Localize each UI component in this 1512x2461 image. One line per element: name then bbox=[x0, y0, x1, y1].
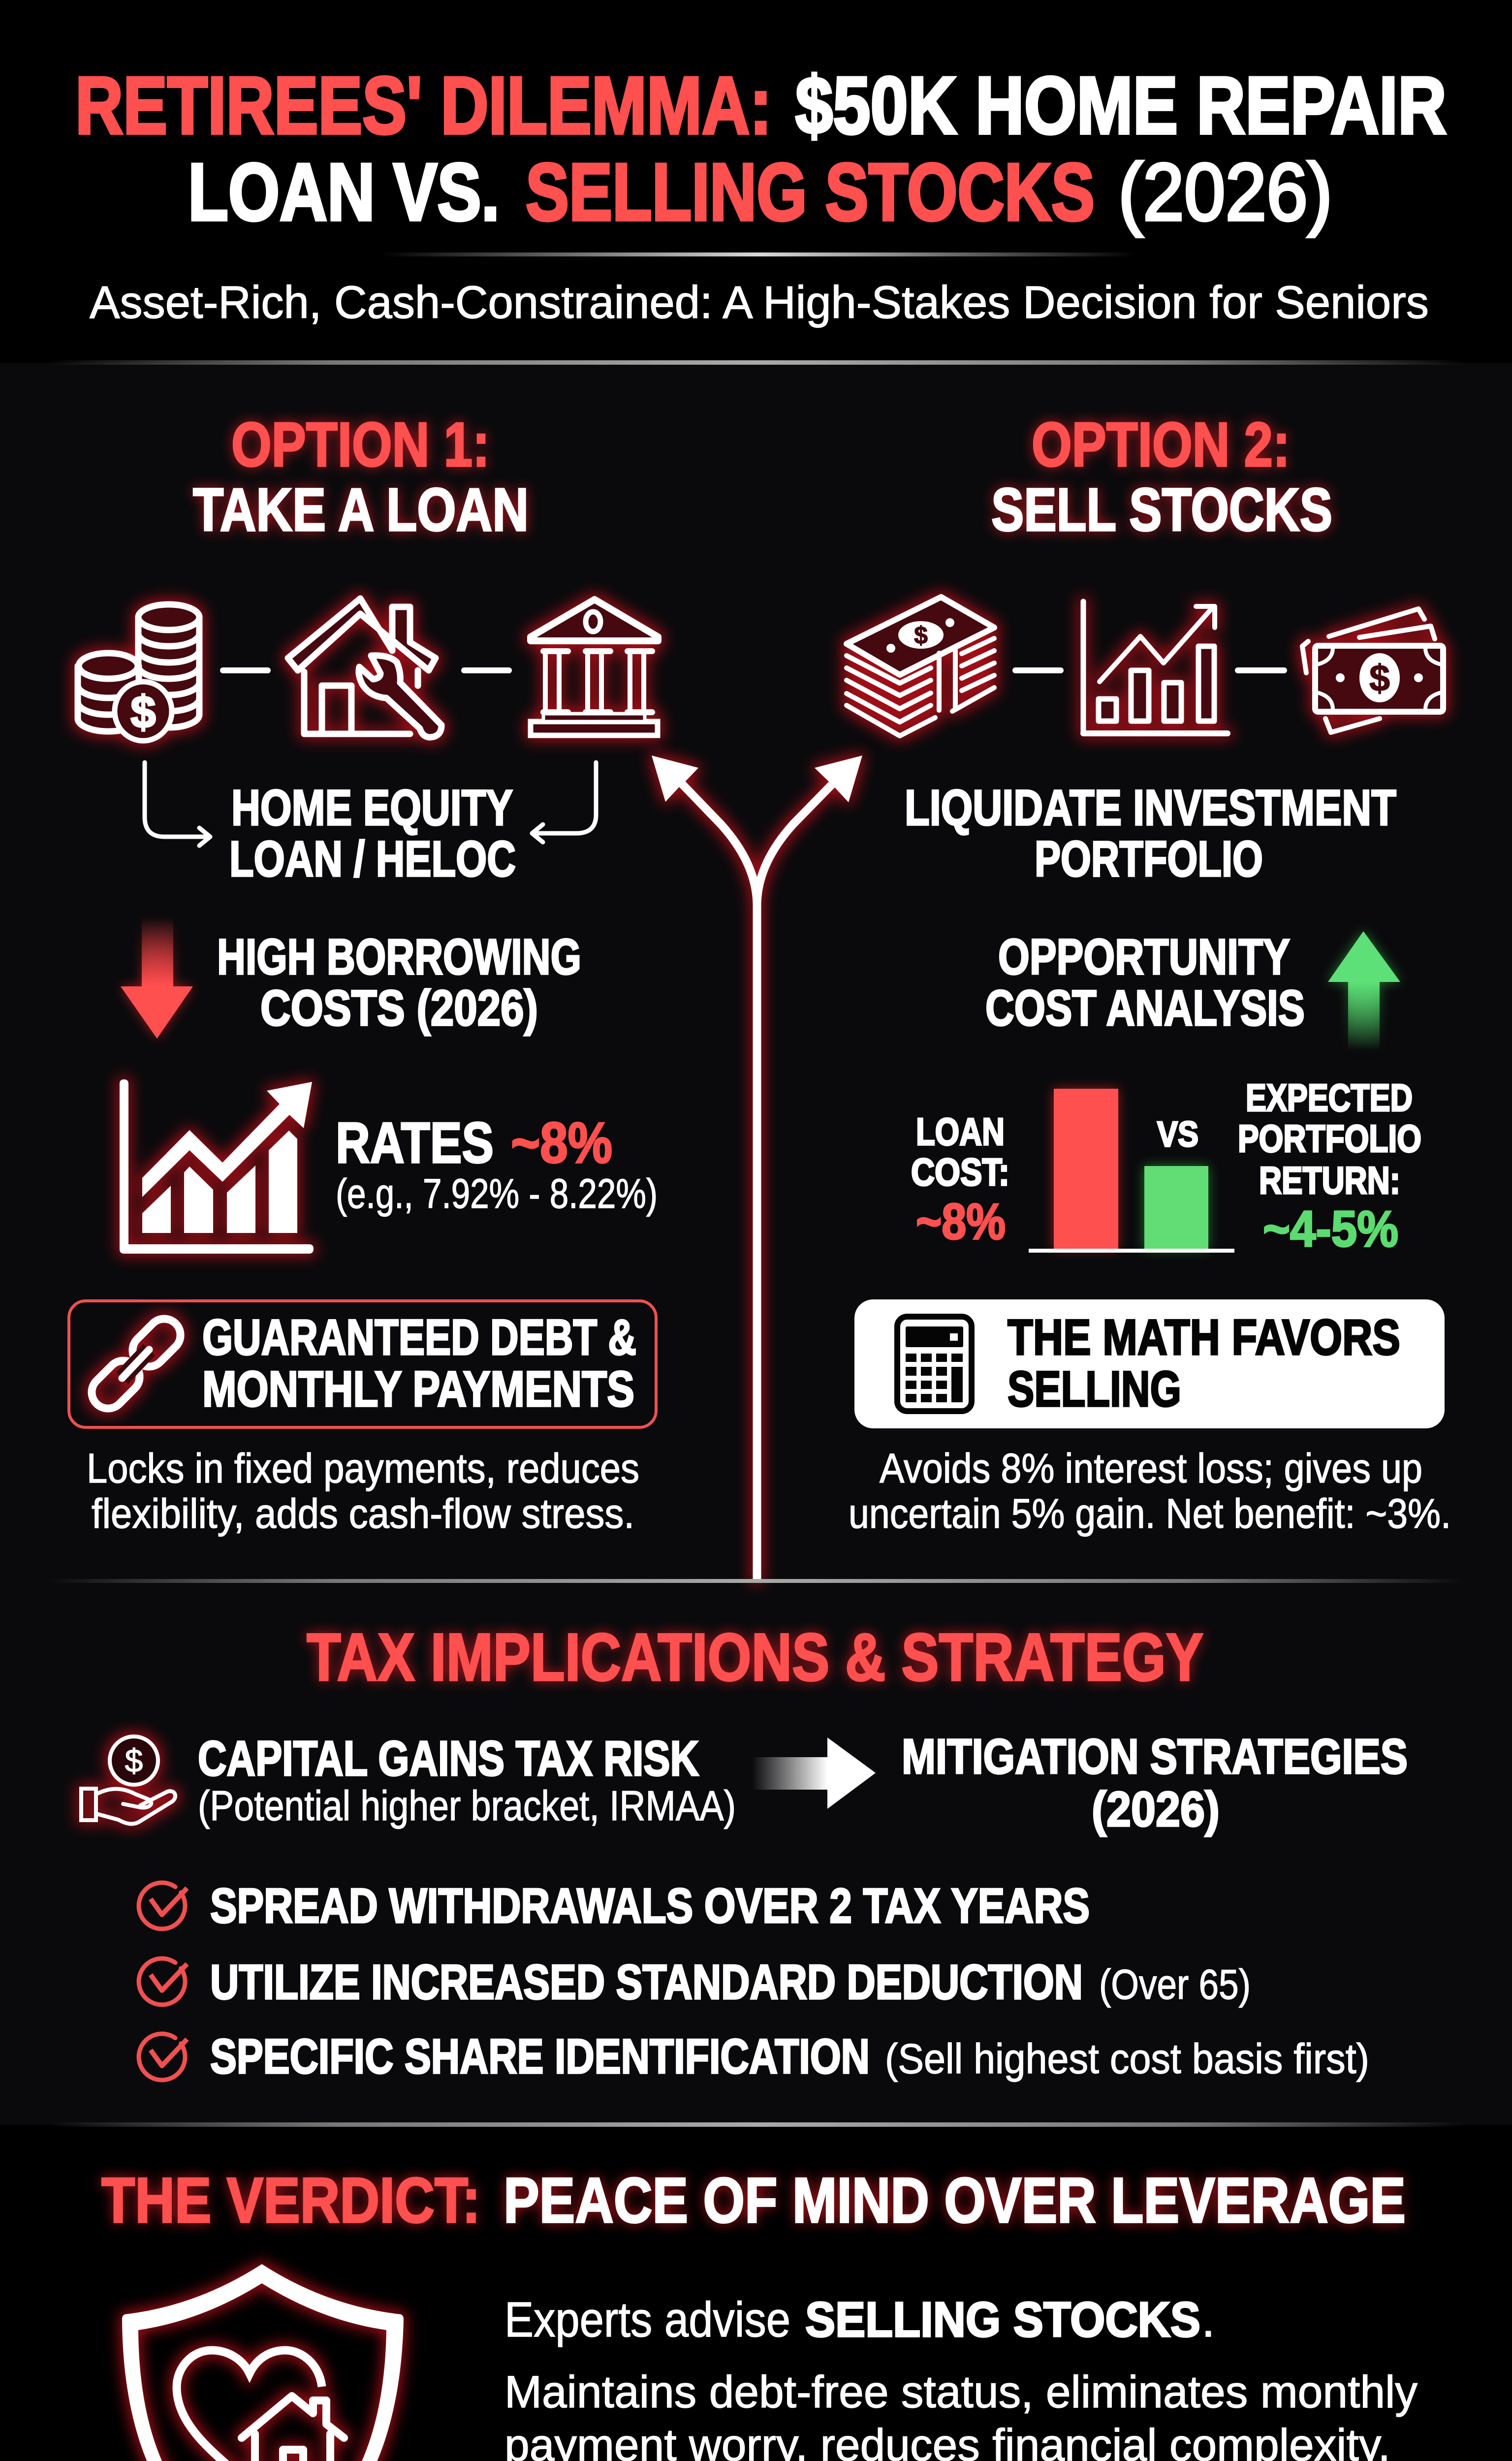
header title: RETIREES' DILEMMA: bbox=[75, 60, 772, 151]
text: rates: ~8% bbox=[511, 1110, 612, 1175]
panel: guaranteed debt callout: MONTHLY PAYMENTS bbox=[202, 1361, 634, 1417]
text: opportunity cost: OPPORTUNITY bbox=[998, 929, 1290, 985]
text: expected return label: ~4-5% bbox=[1263, 1200, 1398, 1257]
text: sell benefit: Avoids 8% interest loss; gives up bbox=[880, 1445, 1422, 1491]
icon: money stack bbox=[847, 597, 994, 736]
text: mitigation strategies: MITIGATION STRATEGIES bbox=[902, 1729, 1408, 1784]
strategy item: standard deduction: (Over 65) bbox=[1099, 1961, 1251, 2008]
text: expected return label bbox=[1238, 1076, 1421, 1257]
connector dash bbox=[1235, 667, 1287, 673]
text: opportunity cost: COST ANALYSIS bbox=[985, 980, 1305, 1036]
text: loan cost label: LOAN bbox=[916, 1110, 1005, 1153]
connector dash bbox=[220, 667, 271, 673]
strategy item: share identification: (Sell highest cost basis first) bbox=[885, 2036, 1369, 2082]
strategy item: standard deduction: UTILIZE INCREASED STANDARD DEDUCTION bbox=[210, 1955, 1083, 2009]
heading: tax implications: TAX IMPLICATIONS & STRATEGY bbox=[307, 1620, 1203, 1695]
text: expected return label: PORTFOLIO bbox=[1238, 1117, 1421, 1160]
text: mitigation strategies bbox=[902, 1729, 1408, 1837]
panel: option 2 heading: OPTION 2: bbox=[1032, 410, 1290, 479]
text: high borrowing costs: COSTS (2026) bbox=[260, 980, 538, 1036]
arrow: home equity right connector bbox=[532, 762, 596, 842]
icon: coin stacks bbox=[78, 604, 199, 741]
header title: LOAN VS. bbox=[188, 147, 500, 237]
strategy item: spread withdrawals: SPREAD WITHDRAWALS OVER 2 TAX YEARS bbox=[210, 1878, 1090, 1933]
text: mitigation strategies: (2026) bbox=[1092, 1782, 1220, 1837]
text: high borrowing costs bbox=[217, 929, 581, 1036]
heading: verdict: THE VERDICT: bbox=[101, 2164, 480, 2236]
panel: math favors callout bbox=[854, 1299, 1445, 1428]
bar chart: loan vs portfolio bbox=[1029, 1089, 1234, 1253]
text: capital gains risk bbox=[198, 1731, 736, 1830]
panel: guaranteed debt callout bbox=[69, 1301, 656, 1427]
text: sell benefit bbox=[849, 1445, 1451, 1537]
text: rates: (e.g., 7.92% - 8.22%) bbox=[336, 1170, 658, 1217]
text: loan cost label: COST: bbox=[911, 1150, 1009, 1194]
panel: guaranteed debt callout: GUARANTEED DEBT & bbox=[202, 1309, 636, 1365]
icon: house with wrench bbox=[288, 599, 441, 737]
text: rates bbox=[336, 1110, 658, 1217]
text: capital gains risk: (Potential higher bracket, IRMAA) bbox=[198, 1783, 736, 1830]
icon: money stack: $ bbox=[914, 622, 928, 649]
subtitle: Asset-Rich, Cash-Constrained: A High-Stakes Decision for Seniors bbox=[90, 277, 1429, 328]
text: loan drawback: Locks in fixed payments, reduces bbox=[87, 1445, 639, 1491]
icon: shield with heart and house bbox=[122, 2264, 404, 2461]
icon: cash bills: $ bbox=[1369, 658, 1390, 699]
panel: option 2 heading: SELL STOCKS bbox=[991, 476, 1332, 544]
header title bbox=[75, 60, 1447, 237]
text: expected return label: EXPECTED bbox=[1246, 1076, 1413, 1119]
text: loan drawback: flexibility, adds cash-flow stress. bbox=[92, 1490, 634, 1537]
icon: bank bbox=[531, 599, 658, 735]
icon: red down arrow bbox=[121, 917, 193, 1039]
connector dash bbox=[461, 667, 512, 673]
text: verdict advice: . bbox=[1201, 2292, 1215, 2347]
icon: hand with coin: $ bbox=[125, 1742, 143, 1779]
text: loan cost label bbox=[911, 1110, 1009, 1250]
icon: cash bills bbox=[1302, 609, 1443, 732]
header title: SELLING STOCKS bbox=[526, 147, 1095, 237]
heading: verdict bbox=[101, 2164, 1406, 2236]
text: opportunity cost bbox=[985, 929, 1305, 1036]
header title: (2026) bbox=[1118, 147, 1332, 237]
panel: math favors callout: SELLING bbox=[1008, 1361, 1181, 1417]
bar chart: loan vs portfolio: VS bbox=[1157, 1115, 1198, 1154]
text: high borrowing costs: HIGH BORROWING bbox=[217, 929, 581, 985]
text: home equity bbox=[229, 780, 516, 887]
icon: coin stacks: $ bbox=[130, 687, 156, 737]
text: verdict advice: Maintains debt-free status, eliminates monthly bbox=[504, 2367, 1418, 2417]
arrow: central fork bbox=[652, 756, 862, 1581]
text: sell benefit: uncertain 5% gain. Net benefit: ~3%. bbox=[849, 1490, 1451, 1537]
text: verdict advice bbox=[504, 2292, 1469, 2461]
text: home equity: LOAN / HELOC bbox=[229, 831, 516, 887]
panel: option 1 heading bbox=[193, 410, 529, 544]
icon: calculator bbox=[897, 1317, 972, 1411]
text: capital gains risk: CAPITAL GAINS TAX RISK bbox=[198, 1731, 699, 1786]
text: rates: RATES bbox=[336, 1110, 494, 1175]
icon: growth chart bbox=[1083, 601, 1228, 733]
strategy item: share identification bbox=[139, 2029, 1369, 2083]
text: liquidate portfolio: LIQUIDATE INVESTMENT bbox=[905, 780, 1396, 836]
text: liquidate portfolio: PORTFOLIO bbox=[1035, 831, 1263, 887]
text: verdict advice: SELLING STOCKS bbox=[805, 2292, 1200, 2347]
text: expected return label: RETURN: bbox=[1259, 1159, 1400, 1202]
icon: hand with coin bbox=[81, 1736, 175, 1824]
connector dash bbox=[1012, 667, 1064, 673]
arrow: to mitigation bbox=[752, 1737, 876, 1809]
panel: option 1 heading: TAKE A LOAN bbox=[193, 476, 529, 544]
text: verdict advice: Experts advise bbox=[504, 2292, 790, 2347]
text: loan cost label: ~8% bbox=[916, 1193, 1006, 1250]
panel: math favors callout: THE MATH FAVORS bbox=[1008, 1309, 1400, 1365]
text: liquidate portfolio bbox=[905, 780, 1396, 887]
icon: rising rates chart bbox=[120, 1079, 314, 1254]
panel: option 2 heading bbox=[991, 410, 1332, 544]
arrow: home equity left connector bbox=[145, 762, 210, 846]
text: loan drawback bbox=[87, 1445, 639, 1537]
text: home equity: HOME EQUITY bbox=[231, 780, 513, 836]
strategy item: share identification: SPECIFIC SHARE IDENTIFICATION bbox=[210, 2029, 870, 2083]
icon: green up arrow bbox=[1328, 931, 1400, 1050]
icon: chain link bbox=[85, 1312, 187, 1415]
panel: option 1 heading: OPTION 1: bbox=[231, 410, 490, 479]
